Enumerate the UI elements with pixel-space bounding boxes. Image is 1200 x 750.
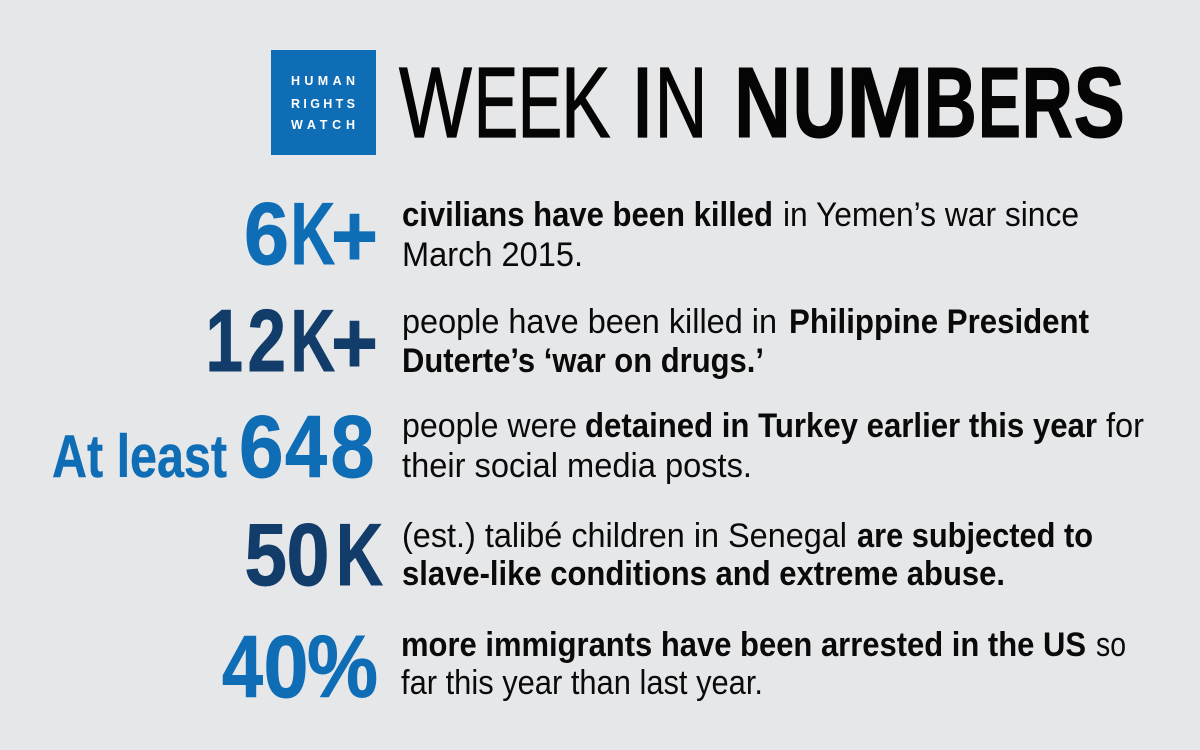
figure: At least 648: At least [52,423,227,490]
figure: 40% [222,617,378,716]
figure: 6K+: + [331,186,378,285]
figure: 6K+: 6 [244,184,289,283]
title [399,47,1125,159]
description: Turkey: for [1106,407,1144,445]
stat row: US immigrants [222,617,1126,716]
stat row: Yemen [244,184,1079,285]
title: M [846,47,924,159]
figure: 6K+: K [290,184,335,283]
figure: 12K+: + [331,293,378,392]
description: Senegal: (est.) talibé children in Senegal [402,517,847,555]
figure: At least 648: 4 [285,397,327,496]
description: US immigrants: more immigrants have been arrested in the US [401,626,1086,664]
description: Turkey [402,407,1144,485]
description: Turkey: people were [402,407,577,445]
description: Yemen: civilians have been killed [402,196,773,234]
title: K [561,47,610,159]
title: N [654,47,708,159]
description: US immigrants: far this year than last year. [401,664,763,702]
description: Philippines: Philippine President [789,303,1089,341]
description: Yemen: March 2015. [402,236,583,274]
figure: 12K+ [206,291,378,392]
description: Yemen [402,196,1079,274]
figure: 50K: 0 [286,505,330,604]
figure: At least 648 [52,397,374,496]
stat row: Philippines [206,291,1089,392]
title: S [1074,47,1125,159]
figure: 50K: 5 [244,505,287,604]
logo: Human Rights Watch: HUMAN [291,74,355,88]
title: E [474,47,518,159]
description: US immigrants: so [1096,626,1126,664]
figure: 12K+: K [290,291,335,390]
figure: At least 648: 8 [330,397,374,496]
description: Senegal: slave-like conditions and extreme abuse. [402,555,1005,593]
title: N [734,47,791,159]
logo: Human Rights Watch: RIGHTS [291,97,355,111]
title: B [924,47,977,159]
figure: 40%: 0 [264,617,308,716]
figure: 50K: K [336,505,383,604]
description: Turkey: their social media posts. [402,447,752,485]
description: Senegal [402,517,1093,593]
stat row: Senegal [244,505,1093,604]
figure: 40%: 4 [222,617,263,716]
description: Turkey: detained in Turkey earlier this year [585,407,1097,445]
description: Senegal: are subjected to [857,517,1093,555]
title: U [792,47,847,159]
description: Philippines: people have been killed in [402,303,777,341]
title: W [399,47,472,159]
figure: 40%: % [307,617,378,716]
title: E [518,47,562,159]
description: Philippines [402,303,1089,380]
figure: 12K+: 2 [248,291,286,390]
stat row: Turkey [52,397,1144,496]
logo: Human Rights Watch: WATCH [291,118,355,132]
description: Yemen: in Yemen’s war since [783,196,1079,234]
description: Philippines: Duterte’s ‘war on drugs.’ [402,342,764,380]
title: E [978,47,1021,159]
figure: At least 648: 6 [239,397,284,496]
title: I [630,47,655,159]
figure: 6K+ [244,184,378,285]
description: US immigrants [401,626,1126,702]
logo: Human Rights Watch [271,50,376,155]
title: R [1022,47,1073,159]
figure: 50K [244,505,383,604]
figure: 12K+: 1 [206,291,243,390]
